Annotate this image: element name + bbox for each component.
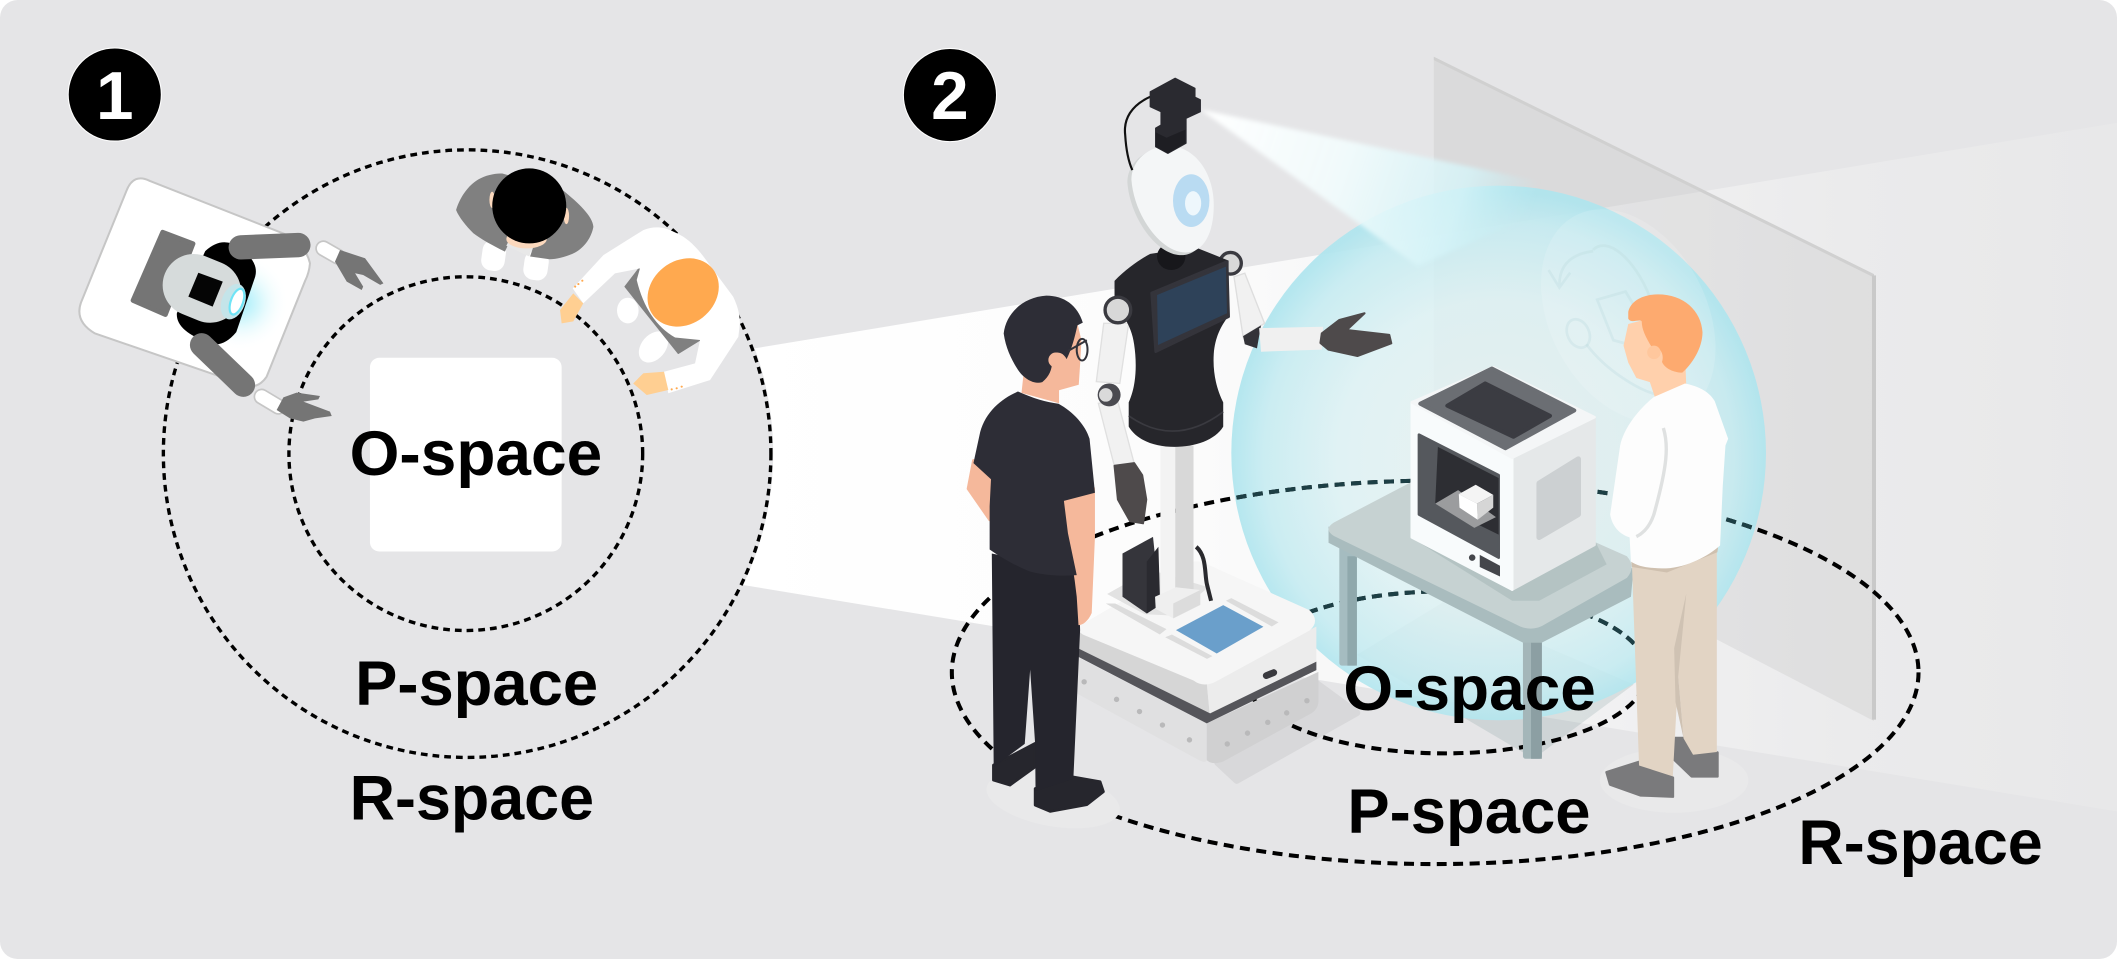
pupil [1185, 191, 1201, 215]
screen [1157, 267, 1227, 345]
robot rear block [133, 232, 193, 315]
label: plan R-space: R-space [350, 764, 594, 834]
sensing sphere [1231, 186, 1766, 720]
cable [1196, 547, 1211, 601]
man in white [1600, 294, 1748, 813]
trousers [1632, 547, 1717, 776]
robot lens [216, 280, 250, 323]
robot torso [177, 242, 256, 344]
label: plan P-space: P-space [355, 649, 598, 719]
label: scene R-space: R-space [1798, 808, 2043, 878]
left leg [1339, 545, 1357, 666]
trouser fold [1674, 593, 1686, 739]
label: scene P-space: P-space [1347, 777, 1590, 847]
left shoulder ring [1105, 297, 1131, 323]
port [1262, 668, 1278, 680]
robot base floor shadow [1218, 683, 1357, 780]
label: plan O-space: O-space [350, 419, 602, 489]
belt shadow [1631, 543, 1719, 572]
shoulders [456, 173, 593, 259]
body [573, 227, 740, 393]
torso [1115, 247, 1229, 447]
table top [1329, 473, 1632, 629]
projection wedge linking plan view to scene [743, 123, 2117, 811]
badge 2 [903, 48, 997, 142]
table floor shadow [1357, 602, 1634, 759]
torso collar ring [1129, 412, 1223, 431]
shoes [1607, 762, 1673, 797]
base lower right face [1207, 672, 1318, 763]
ear [1647, 346, 1661, 359]
ears [489, 192, 569, 224]
shirt arm fold [1636, 428, 1666, 537]
blue screen [1176, 605, 1263, 653]
forearm left [1098, 402, 1134, 467]
right shoulder ring [1220, 252, 1241, 274]
plan view: table [370, 358, 562, 552]
back shadow [625, 267, 700, 353]
pole [1155, 446, 1200, 618]
base rivets [1081, 679, 1310, 747]
back wall [1434, 57, 1876, 721]
front face [1412, 402, 1512, 590]
cuff stitching [574, 280, 683, 390]
faint wall graphic [1506, 179, 1751, 453]
3D printer [1411, 367, 1607, 601]
glasses [1068, 339, 1088, 360]
shirt [1610, 383, 1728, 568]
badge 2: 2 [931, 59, 969, 134]
right arm [1062, 487, 1095, 625]
neck and face [1624, 317, 1686, 398]
hair [1004, 296, 1083, 383]
front right leg [1523, 635, 1542, 759]
plan view: person with black hair [456, 168, 593, 282]
hands [560, 293, 583, 323]
man in black [968, 296, 1124, 838]
ear [1048, 353, 1063, 367]
top opening [1447, 383, 1550, 437]
power button [1469, 554, 1475, 561]
base upper left face [1078, 626, 1210, 714]
inner dashed ellipse: scene O-space boundary [1242, 591, 1647, 753]
trousers [992, 554, 1080, 791]
right face [1512, 417, 1595, 590]
plate around pole [1107, 570, 1208, 616]
robot head [153, 245, 250, 332]
printed cube [1459, 485, 1493, 520]
head face [1131, 146, 1214, 252]
head [634, 244, 732, 341]
neck and face [1022, 323, 1081, 403]
t-shirt [973, 392, 1095, 576]
robot right forearm [323, 248, 338, 257]
base lower left face [1077, 657, 1207, 762]
top face [1412, 367, 1595, 458]
robot right hand [335, 250, 383, 290]
plan view: robot [79, 178, 383, 422]
eye [1173, 174, 1209, 227]
feet [480, 239, 507, 272]
table edge [1329, 527, 1634, 643]
skin below hair [506, 230, 547, 248]
control panel [1480, 555, 1500, 577]
neck [506, 238, 535, 257]
camera light beam [1200, 109, 1586, 266]
screen bezel [1152, 262, 1229, 352]
forearm right [1259, 327, 1323, 352]
side box [1122, 537, 1160, 614]
hand right [1320, 313, 1391, 356]
hair [1628, 294, 1703, 373]
robot left hand [277, 393, 332, 422]
plan view: outer dashed circle [163, 150, 771, 757]
chamber [1435, 447, 1499, 535]
arm joint right [1243, 325, 1261, 348]
cable to camera [1125, 97, 1150, 170]
robot lower arm [202, 345, 243, 385]
robot camera block [188, 273, 223, 307]
floor shadow [1600, 748, 1748, 813]
plan view: inner dashed circle [289, 277, 643, 631]
base upper right face [1207, 626, 1316, 714]
top recess [1420, 369, 1574, 448]
upper arm right [1234, 273, 1265, 337]
floor shadow [982, 761, 1124, 838]
upper arm left [1096, 323, 1129, 383]
slots [1106, 598, 1279, 659]
badge 1 [68, 48, 161, 141]
shadow under printer [1411, 537, 1607, 601]
left arm [968, 460, 995, 520]
camera [1150, 78, 1200, 153]
neck [1157, 243, 1185, 270]
table [1329, 473, 1634, 759]
badge 1: 1 [96, 59, 134, 134]
base top surface [1078, 561, 1315, 685]
head side [1127, 149, 1210, 255]
robot base plate [79, 178, 310, 386]
side panel [1539, 459, 1578, 537]
feet [617, 298, 639, 323]
robot glow [192, 254, 289, 351]
plan view: person with orange hair [560, 227, 740, 395]
elbow joint [1098, 383, 1121, 406]
base dark band [1078, 648, 1316, 723]
big dashed ellipse: scene R/P boundary [952, 481, 1919, 864]
robot left forearm [262, 397, 278, 407]
hand left [1115, 463, 1146, 523]
robot upper arm [241, 245, 298, 247]
build plate [1435, 490, 1496, 528]
shoes [993, 743, 1035, 785]
door frame [1419, 435, 1499, 558]
hair [492, 168, 566, 243]
robot in scene [1077, 78, 1391, 763]
label: scene O-space: O-space [1343, 654, 1596, 724]
